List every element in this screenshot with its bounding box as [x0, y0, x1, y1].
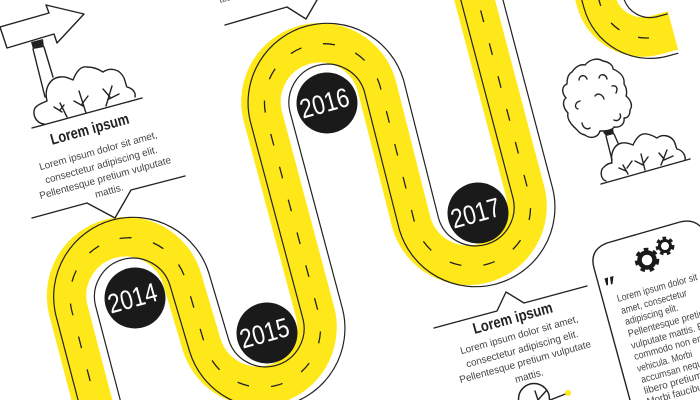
callout line: top centre	[225, 0, 317, 25]
heading: Lorem ipsum	[48, 111, 131, 149]
text block: second Lorem ipsum	[458, 300, 593, 386]
bush ground line	[32, 98, 142, 128]
road centre dashes	[70, 0, 531, 400]
body text: consectetur adipiscing elit.	[465, 329, 580, 370]
bush outline	[601, 134, 685, 181]
callout line: first block	[32, 176, 185, 218]
body text	[458, 314, 593, 386]
trunk bracket	[603, 128, 614, 136]
body text: Lorem ipsum dolor sit amet,	[38, 130, 159, 173]
icon: quotation mark	[604, 276, 614, 286]
body text: consectetur adipiscing elit.	[44, 145, 159, 186]
card body text: amet, consectetur	[620, 288, 689, 317]
bush branches	[619, 150, 673, 174]
signpost arrow	[0, 5, 84, 48]
heading: Lorem ipsum	[471, 300, 555, 338]
year marker 2015: 2015	[236, 312, 293, 354]
body text: Pellentesque pretium vulputate	[458, 339, 593, 386]
icon: signpost with bush	[0, 5, 142, 128]
year marker 2014: 2014	[104, 277, 161, 319]
icon: tree with bush	[563, 59, 690, 184]
year marker 2016: 2016	[296, 82, 353, 124]
year marker 2016	[296, 72, 358, 134]
card body text: adipiscing elit.	[624, 303, 680, 328]
body text	[38, 130, 173, 202]
card body text	[616, 272, 700, 400]
road centre dashes: upper right bend	[596, 0, 659, 38]
body text: Lorem ipsum dolor sit amet,	[459, 314, 580, 357]
signpost post	[33, 47, 53, 97]
tree canopy	[563, 59, 631, 137]
year marker 2015	[236, 302, 298, 364]
panel: gears note card	[593, 221, 700, 400]
callout line: second block	[434, 286, 587, 328]
signpost bracket	[31, 39, 44, 49]
year marker 2017: 2017	[447, 192, 504, 234]
icon: large gear	[636, 250, 658, 270]
icon: clock with pointer	[518, 384, 571, 400]
body text: mattis.	[94, 182, 125, 201]
tree trunk	[606, 134, 618, 160]
body text: Pellentesque pretium vulputate	[38, 155, 173, 202]
bush outline	[34, 67, 135, 124]
canopy leaf marks	[576, 75, 621, 129]
icon: small gear	[657, 238, 673, 254]
text block: first Lorem ipsum	[38, 111, 173, 202]
card outline	[593, 221, 700, 400]
bush branches	[54, 86, 119, 117]
year marker 2017	[447, 182, 508, 244]
body text: mattis.	[514, 367, 545, 386]
year marker 2014	[104, 268, 166, 328]
bush ground line	[601, 159, 690, 184]
